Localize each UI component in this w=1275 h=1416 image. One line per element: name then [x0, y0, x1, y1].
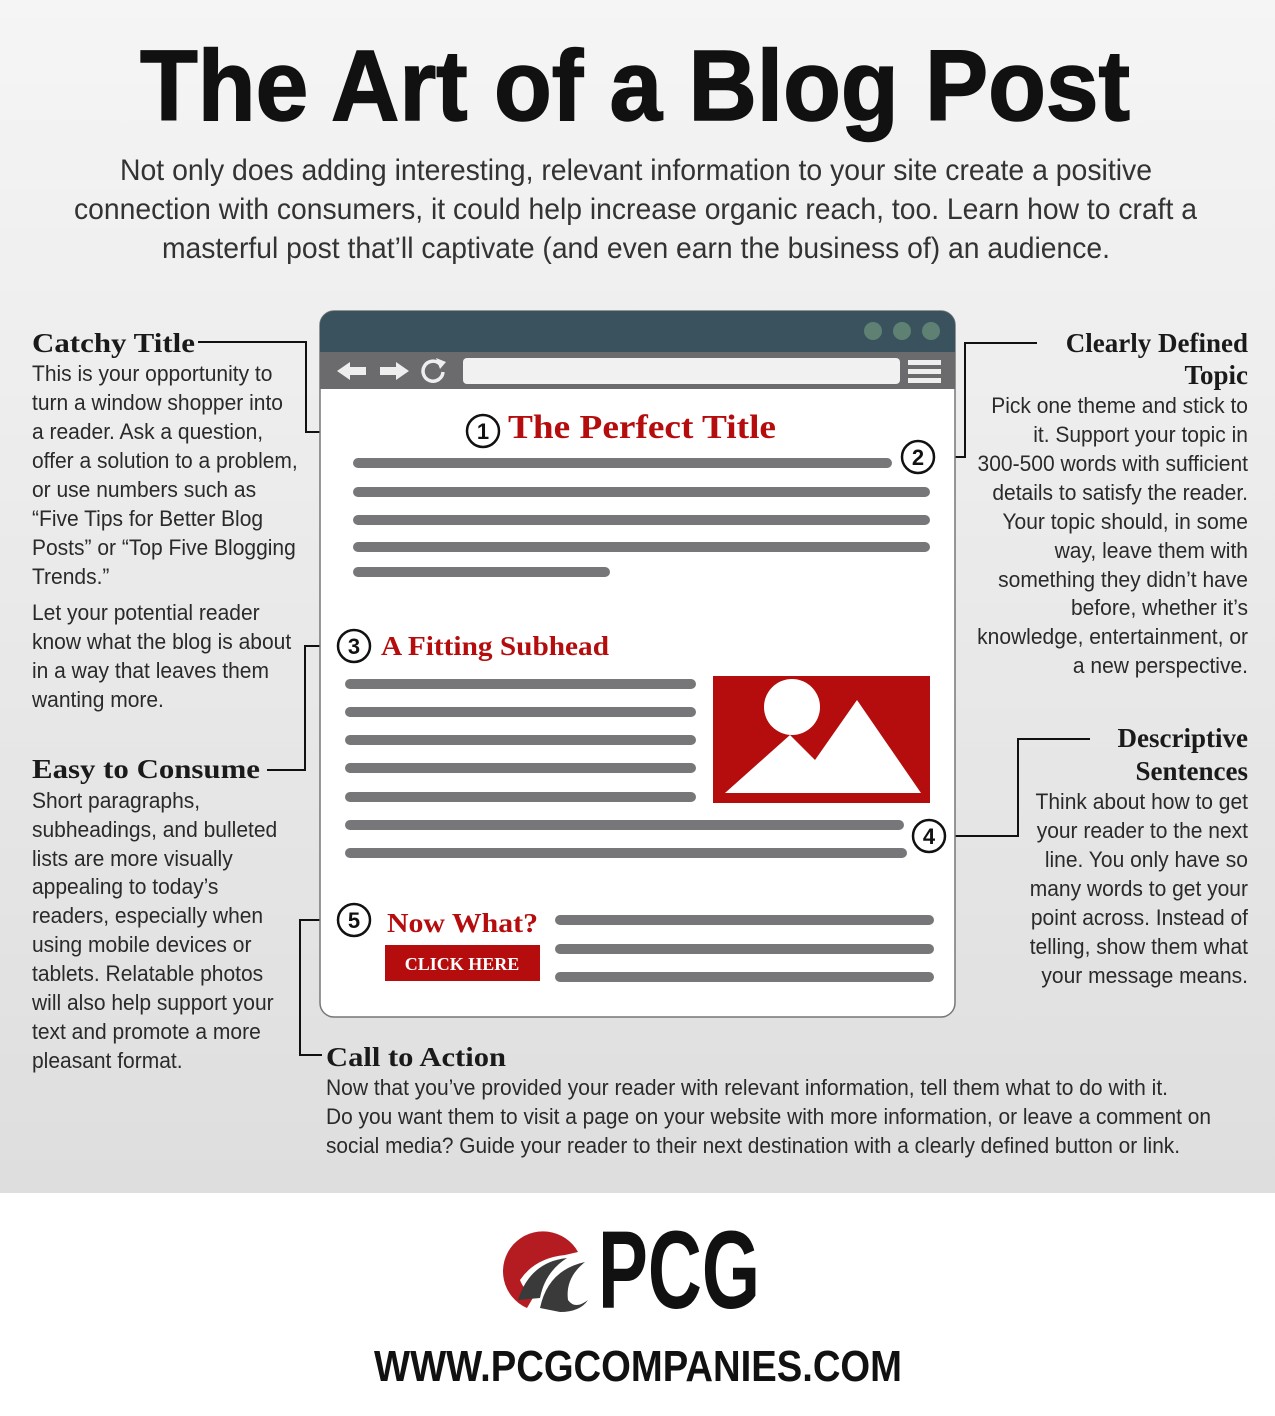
- Catchy Title: Posts” or “Top Five Blogging: [32, 536, 296, 560]
- connector lines: [198, 342, 1090, 1055]
- Call to Action: social media? Guide your reader to their next destination with a clearly defined button or link.: [326, 1133, 1180, 1158]
- icon: image placeholder: [713, 676, 930, 803]
- Easy to Consume: subheadings, and bulleted: [32, 818, 277, 842]
- Catchy Title: Trends.”: [32, 565, 109, 589]
- intro text: Not only does adding interesting, relevant information to your site create a positive: [120, 154, 1152, 187]
- Catchy Title: Catchy Title: [32, 328, 195, 358]
- Descriptive Sentences: your reader to the next: [1037, 819, 1248, 843]
- Clearly Defined Topic: Your topic should, in some: [1002, 510, 1248, 534]
- Call to Action: Call to Action: [326, 1042, 506, 1072]
- Descriptive Sentences: point across. Instead of: [1031, 906, 1248, 930]
- Descriptive Sentences: many words to get your: [1030, 877, 1248, 901]
- icon: nav arrows: [337, 362, 409, 380]
- Clearly Defined Topic: Topic: [1184, 360, 1248, 390]
- Catchy Title: This is your opportunity to: [32, 362, 272, 386]
- Clearly Defined Topic: way, leave them with: [1054, 539, 1248, 563]
- text: 1: [477, 419, 489, 444]
- Catchy Title: offer a solution to a problem,: [32, 449, 298, 473]
- text: Now What?: [387, 908, 538, 938]
- number circles: [338, 415, 945, 936]
- Catchy Title: wanting more.: [31, 688, 164, 712]
- intro text: [74, 154, 1197, 265]
- Catchy Title: Let your potential reader: [32, 601, 260, 625]
- logo: [503, 1209, 760, 1332]
- intro text: connection with consumers, it could help increase organic reach, too. Learn how to craft a: [74, 193, 1197, 226]
- text placeholder lines: [350, 463, 929, 977]
- Descriptive Sentences: Sentences: [1136, 756, 1248, 786]
- title: The Art of a Blog Post: [140, 30, 1130, 142]
- Catchy Title: “Five Tips for Better Blog: [32, 507, 263, 531]
- Clearly Defined Topic: a new perspective.: [1073, 654, 1248, 678]
- Call to Action: Do you want them to visit a page on your website with more information, or leave a comment on: [326, 1104, 1211, 1129]
- Easy to Consume: Easy to Consume: [32, 754, 260, 784]
- button: [385, 945, 540, 981]
- Easy to Consume: Short paragraphs,: [32, 789, 200, 813]
- red headings: The Perfect Title: [508, 409, 776, 446]
- Descriptive Sentences: Descriptive: [1118, 723, 1248, 753]
- Catchy Title: a reader. Ask a question,: [32, 420, 263, 444]
- Easy to Consume: readers, especially when: [32, 904, 263, 928]
- logo: PCG: [598, 1209, 760, 1332]
- Clearly Defined Topic: knowledge, entertainment, or: [977, 625, 1248, 649]
- intro text: masterful post that’ll captivate (and even earn the business of) an audience.: [162, 232, 1110, 265]
- Clearly Defined Topic: 300-500 words with sufficient: [978, 452, 1248, 476]
- Clearly Defined Topic: before, whether it’s: [1071, 596, 1248, 620]
- button: CLICK HERE: [405, 954, 519, 974]
- Clearly Defined Topic: [977, 328, 1248, 678]
- Clearly Defined Topic: Clearly Defined: [1066, 328, 1248, 358]
- Easy to Consume: text and promote a more: [32, 1020, 261, 1044]
- Clearly Defined Topic: Pick one theme and stick to: [991, 394, 1248, 418]
- Catchy Title: turn a window shopper into: [32, 391, 283, 415]
- text: 4: [923, 824, 936, 849]
- Catchy Title: [31, 328, 298, 712]
- Descriptive Sentences: line. You only have so: [1045, 848, 1248, 872]
- Easy to Consume: will also help support your: [31, 991, 274, 1015]
- text: A Fitting Subhead: [381, 631, 609, 661]
- Clearly Defined Topic: it. Support your topic in: [1033, 423, 1248, 447]
- Clearly Defined Topic: details to satisfy the reader.: [992, 481, 1248, 505]
- icon: refresh: [423, 361, 443, 381]
- website url: WWW.PCGCOMPANIES.COM: [374, 1342, 902, 1391]
- Easy to Consume: appealing to today’s: [32, 875, 218, 899]
- Catchy Title: in a way that leaves them: [32, 659, 269, 683]
- text: 5: [348, 908, 360, 933]
- Easy to Consume: using mobile devices or: [32, 933, 251, 957]
- Clearly Defined Topic: something they didn’t have: [998, 568, 1248, 592]
- text: 3: [348, 634, 360, 659]
- browser window: [320, 311, 955, 1017]
- icon: menu: [908, 360, 941, 383]
- Catchy Title: or use numbers such as: [32, 478, 256, 502]
- Easy to Consume: [31, 754, 277, 1073]
- Descriptive Sentences: telling, show them what: [1030, 935, 1248, 959]
- Easy to Consume: tablets. Relatable photos: [32, 962, 263, 986]
- Descriptive Sentences: [1030, 723, 1248, 988]
- text: 2: [912, 445, 924, 470]
- Descriptive Sentences: your message means.: [1041, 964, 1248, 988]
- Call to Action: [326, 1042, 1211, 1158]
- Descriptive Sentences: Think about how to get: [1036, 790, 1248, 814]
- Call to Action: Now that you’ve provided your reader with relevant information, tell them what to do with it.: [326, 1075, 1168, 1100]
- Catchy Title: know what the blog is about: [32, 630, 291, 654]
- Easy to Consume: lists are more visually: [32, 847, 233, 871]
- Easy to Consume: pleasant format.: [32, 1049, 183, 1073]
